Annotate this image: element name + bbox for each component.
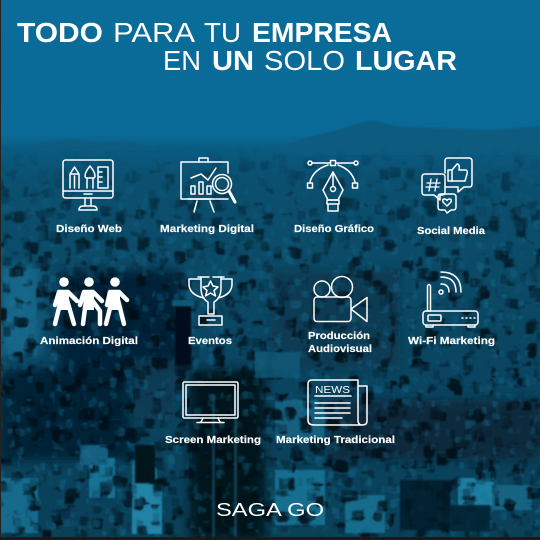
title: TODO [17, 17, 103, 48]
icon: trophy with star [189, 277, 232, 325]
title: SOLO [264, 45, 345, 76]
label: Social Media [417, 225, 485, 237]
title: TU [204, 17, 241, 48]
service: Eventos [188, 277, 232, 347]
label: Eventos [188, 335, 232, 347]
icon: flat screen [183, 382, 238, 422]
service: Producción Audiovisual [308, 276, 372, 355]
label: Diseño Gráfico [294, 223, 374, 235]
icon: pen tool with bezier [308, 160, 358, 211]
icon: film camera [314, 276, 367, 322]
icon: presentation board with magnifier [181, 158, 235, 212]
service: Marketing Tradicional [276, 380, 395, 446]
icon: newspaper: NEWS [315, 384, 350, 396]
title [17, 17, 457, 76]
icon: three walking figures [55, 277, 127, 324]
service: Diseño Gráfico [294, 160, 374, 235]
title: LUGAR [355, 45, 457, 76]
label: Marketing Digital [160, 223, 254, 235]
title: UN [212, 45, 254, 76]
label: Marketing Tradicional [276, 434, 395, 446]
title: EMPRESA [252, 17, 392, 48]
labels: Producción [308, 330, 370, 342]
icon: router with wifi [423, 272, 478, 327]
title: PARA [113, 17, 195, 48]
service: Animación Digital [40, 277, 138, 347]
service: Social Media [417, 158, 485, 237]
service: Screen Marketing [165, 382, 261, 446]
logo: SAGA GO: SAGA GO [216, 500, 324, 520]
label: Wi-Fi Marketing [408, 335, 495, 347]
service: Marketing Digital [160, 158, 254, 235]
title: EN [163, 45, 201, 76]
icon: chat bubbles [422, 158, 472, 213]
label: Screen Marketing [165, 434, 261, 446]
labels: Audiovisual [308, 343, 372, 355]
label: Animación Digital [40, 335, 138, 347]
label: Diseño Web [56, 223, 122, 235]
service: Diseño Web [56, 160, 122, 235]
service: Wi-Fi Marketing [408, 272, 495, 347]
icon: monitor with design tools [63, 160, 113, 210]
labels [308, 330, 372, 355]
